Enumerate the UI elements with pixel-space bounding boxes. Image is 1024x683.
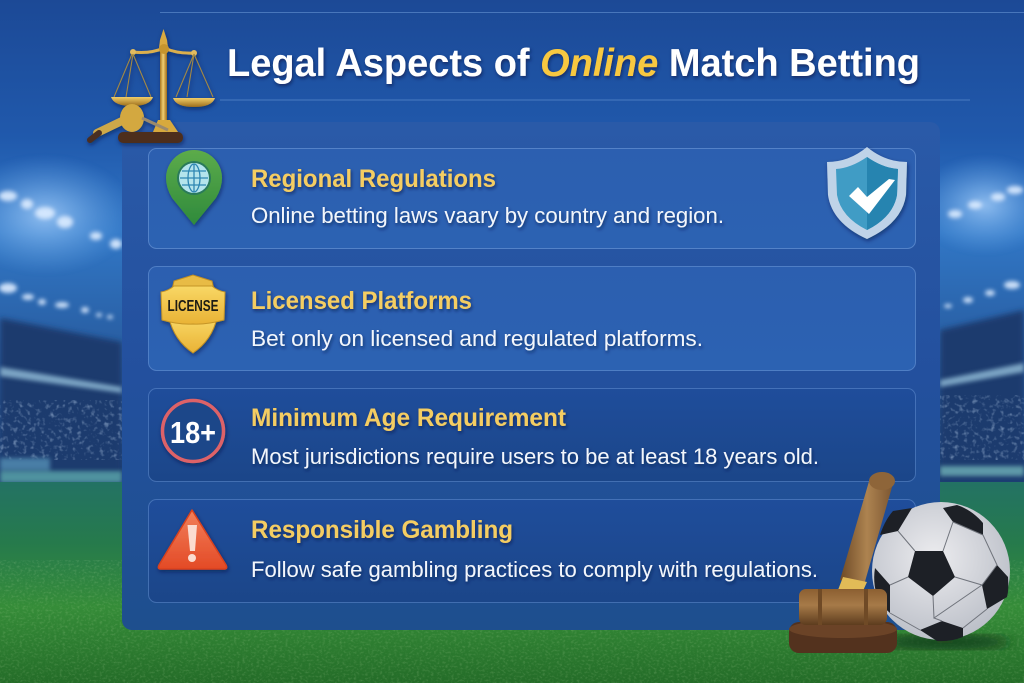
text: age description: Most jurisdictions require users to be at least 18 years old. (251, 444, 819, 469)
icon: shield with check (827, 147, 907, 239)
heading: Responsible Gambling: Responsible Gambling (251, 516, 513, 544)
icon: license badge: LICENSE (168, 298, 219, 315)
icon: gavel and sound block (789, 472, 897, 653)
title rules (160, 12, 1024, 100)
row: Responsible Gambling (148, 500, 916, 602)
text: licensed description: Bet only on licensed and regulated platforms. (251, 326, 703, 351)
text: regional description: Online betting laws vaary by country and region. (251, 203, 724, 228)
title: Legal Aspects of Online Match Betting (227, 42, 920, 85)
heading: Regional Regulations: Regional Regulations (251, 165, 496, 193)
icon: map pin with globe (166, 150, 222, 225)
heading: Minimum Age Requirement: Minimum Age Requirement (251, 404, 567, 432)
icon: 18+ circle: 18+ (170, 415, 216, 450)
icon: soccer ball (872, 502, 1011, 649)
icon: 18+ circle (162, 400, 224, 462)
icon: license badge (161, 275, 225, 353)
row: Minimum Age Requirement (148, 388, 916, 482)
main translucent panel (122, 122, 940, 630)
icon: warning triangle (158, 510, 227, 569)
text: gambling description: Follow safe gambling practices to comply with regulations. (251, 557, 818, 582)
heading: Licensed Platforms: Licensed Platforms (251, 287, 472, 315)
row: Licensed Platforms (148, 266, 916, 370)
row: Regional Regulations (148, 147, 916, 248)
icon: scales of justice with gavel (90, 29, 215, 143)
